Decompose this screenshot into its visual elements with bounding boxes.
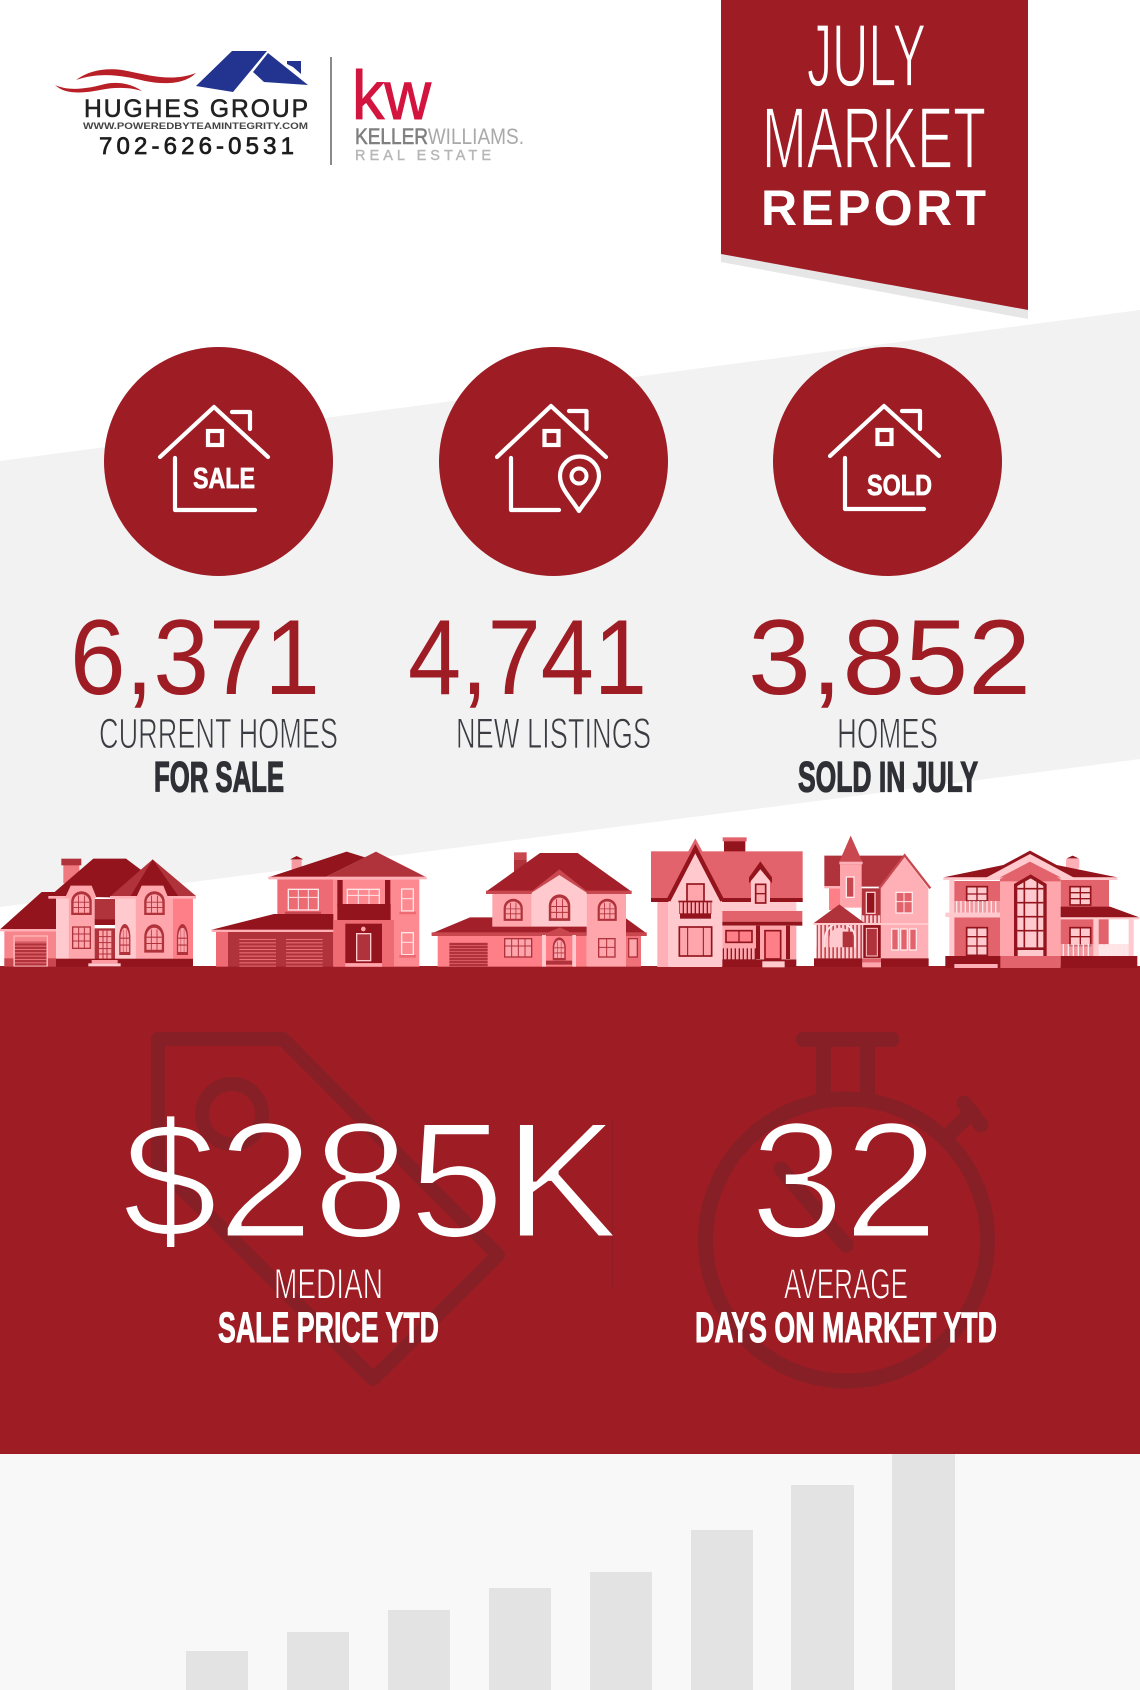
icon: house sold xyxy=(830,406,939,509)
label line 2: FOR SALE xyxy=(154,754,284,802)
label line 1: AVERAGE xyxy=(784,1260,908,1308)
icon: house sale xyxy=(160,407,268,510)
icon: blue roof xyxy=(196,51,308,92)
label: NEW LISTINGS xyxy=(456,710,651,758)
real estate tagline: REAL ESTATE xyxy=(355,148,491,164)
company name: HUGHES GROUP xyxy=(84,95,310,123)
stat: homes sold xyxy=(748,347,1031,802)
bar chart decoration xyxy=(186,1454,955,1690)
banner ribbon xyxy=(721,0,1028,310)
title: Market: MARKET xyxy=(762,90,986,187)
title: July: JULY xyxy=(807,5,926,105)
house 5 xyxy=(813,836,930,967)
circle badge xyxy=(773,347,1002,576)
big number: $285K xyxy=(122,1088,619,1272)
phone number: 702-626-0531 xyxy=(99,133,294,160)
label line 2: SOLD IN JULY xyxy=(798,754,978,802)
kw mark: kw xyxy=(352,57,431,134)
stat: new listings xyxy=(408,347,668,758)
logo: Keller Williams xyxy=(352,57,524,164)
title banner xyxy=(721,0,1028,319)
number: 6,371 xyxy=(70,597,320,717)
red stats panel xyxy=(0,966,1140,1454)
house 4 xyxy=(651,837,803,967)
number: 4,741 xyxy=(408,597,647,717)
stat: median sale price xyxy=(122,1088,619,1352)
icon: house pin xyxy=(497,406,606,511)
number: 3,852 xyxy=(748,597,1031,717)
title: Report: REPORT xyxy=(761,180,986,236)
circle badge xyxy=(439,347,668,576)
house 1 xyxy=(0,859,196,967)
stat: homes for sale xyxy=(70,347,338,802)
icon: price tag watermark xyxy=(158,1039,498,1379)
icon: red swooshes xyxy=(55,69,196,92)
house 6 xyxy=(943,851,1139,968)
background: diagonal gray band xyxy=(0,310,1140,907)
label line 1: MEDIAN xyxy=(274,1260,383,1308)
logo divider xyxy=(330,57,332,165)
faint vertical guide xyxy=(612,1120,613,1288)
icon: house sold: SOLD xyxy=(867,470,932,502)
wordmark: KELLERWILLIAMS. xyxy=(355,124,524,149)
house row illustration xyxy=(0,836,1139,968)
icon: stopwatch watermark xyxy=(706,1040,988,1381)
icon: house sale: SALE xyxy=(193,463,255,495)
logo: Hughes Group xyxy=(55,51,310,160)
house 2 xyxy=(211,852,427,967)
label line 1: CURRENT HOMES xyxy=(99,710,338,758)
banner shadow xyxy=(721,254,1028,319)
circle badge xyxy=(104,347,333,576)
house 3 xyxy=(432,852,647,967)
label line 2: SALE PRICE YTD xyxy=(218,1304,439,1352)
website: WWW.POWEREDBYTEAMINTEGRITY.COM xyxy=(83,121,308,131)
label line 1: HOMES xyxy=(837,710,938,758)
big number: 32 xyxy=(750,1088,938,1272)
footer panel xyxy=(0,1454,1140,1690)
stat: average days on market xyxy=(695,1088,997,1352)
